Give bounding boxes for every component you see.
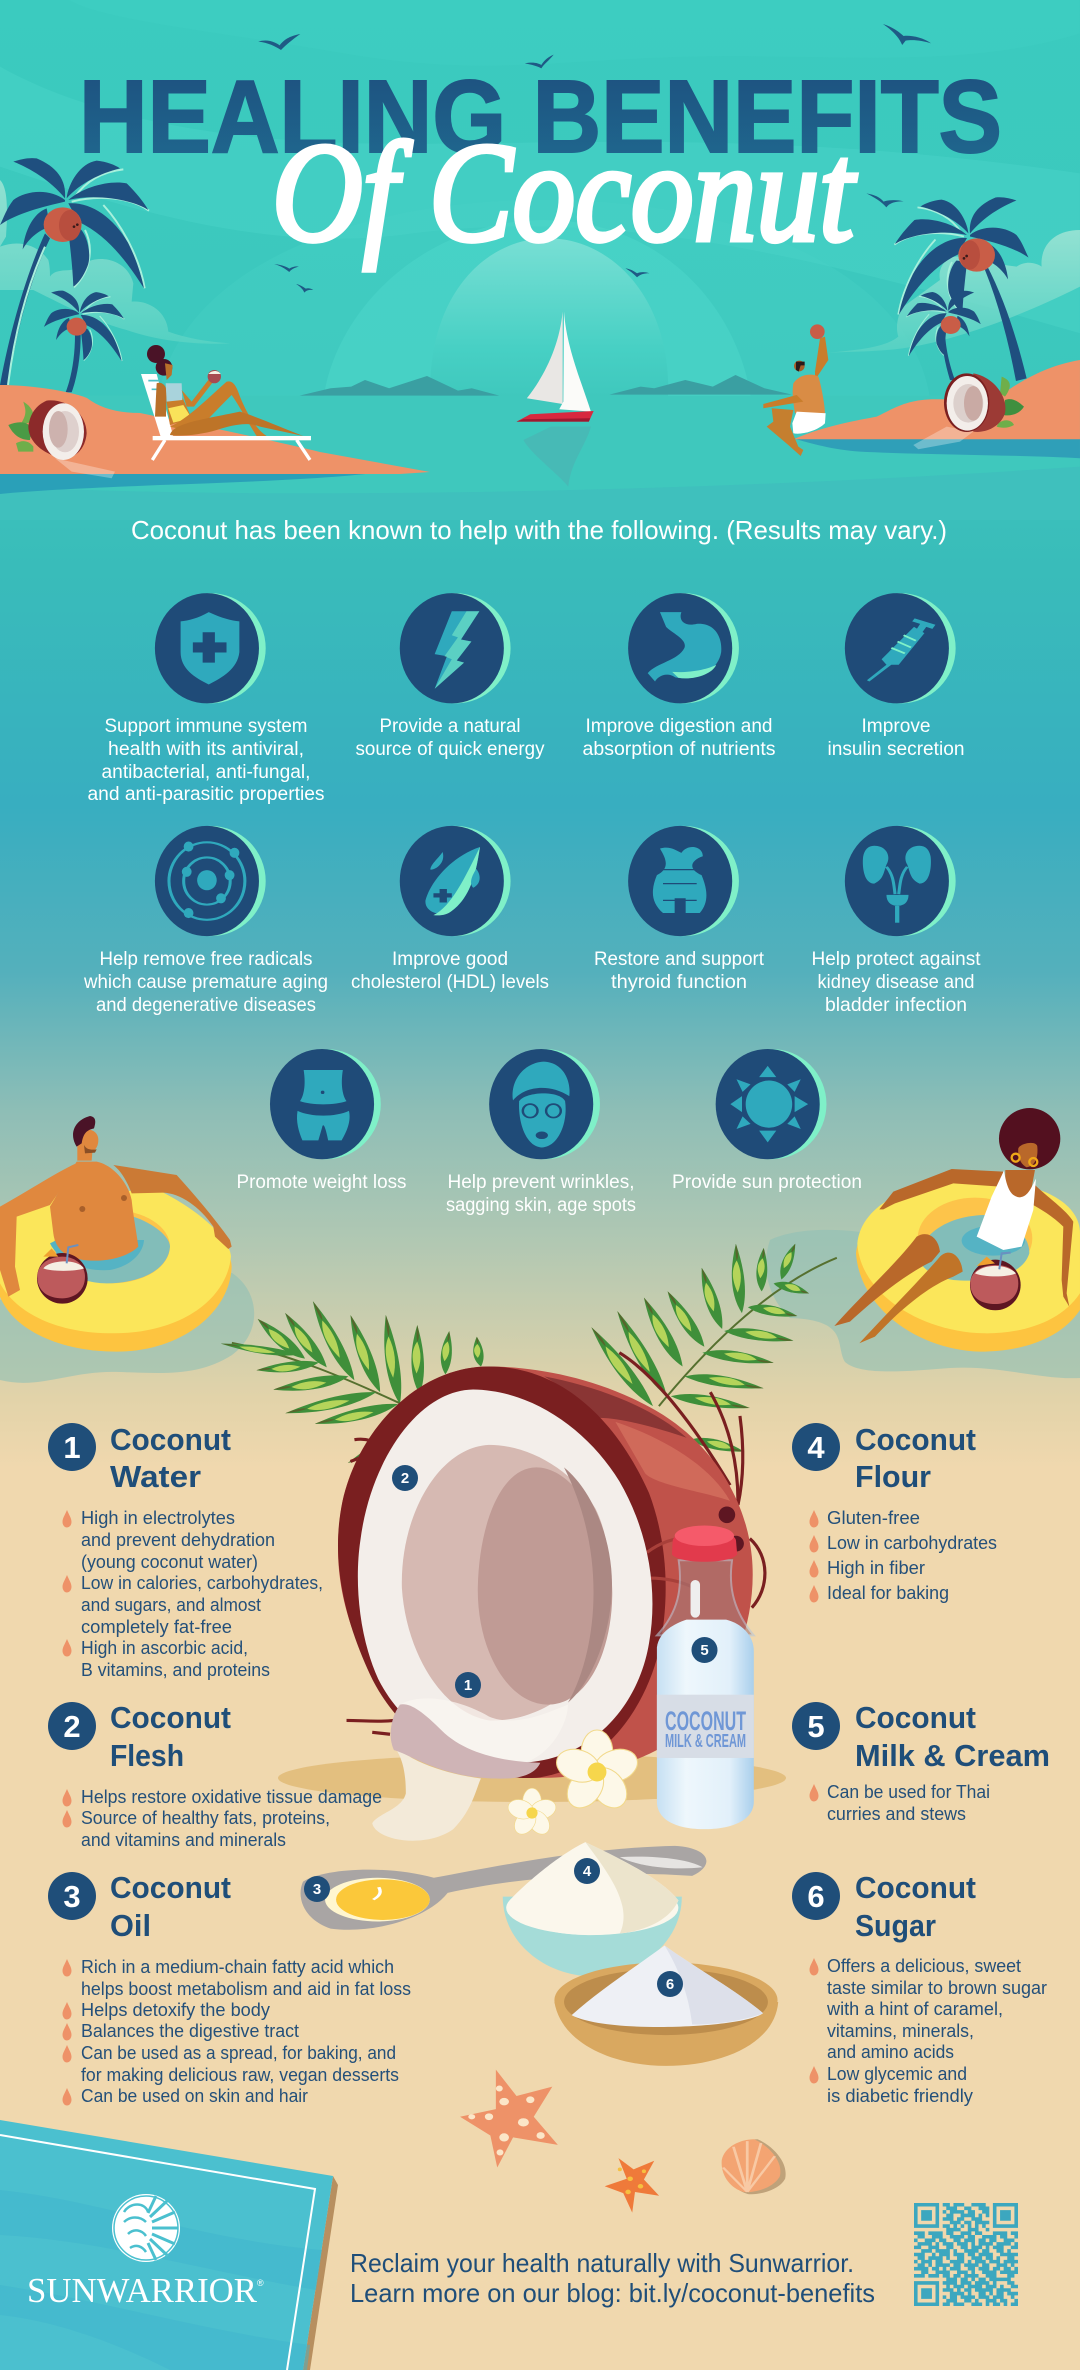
bottle label text <box>665 1706 746 1751</box>
wooden bowl of coconut sugar <box>554 1946 778 2066</box>
benefit text: wrinkles: Help prevent wrinkles, <box>448 1172 634 1193</box>
benefit text: immune: and anti-parasitic properties <box>88 784 324 805</box>
palm fronds behind coconut <box>220 1242 837 1468</box>
left palms <box>0 158 149 392</box>
section 3: coconut oil: Can be used on skin and hair <box>81 2085 308 2106</box>
section 3: coconut oil: Can be used as a spread, for baking, and <box>81 2042 396 2063</box>
benefit text: immune: antibacterial, anti-fungal, <box>102 762 310 783</box>
section 1: coconut water: High in electrolytes <box>81 1507 235 1528</box>
icon: face with towel <box>489 1049 600 1159</box>
bottle label text: MILK & CREAM <box>665 1731 746 1751</box>
section 1: coconut water: (young coconut water) <box>81 1551 258 1572</box>
section 2: coconut flesh <box>48 1700 382 1850</box>
section 6: coconut sugar: Sugar <box>855 1908 936 1943</box>
part number badges: 3 <box>313 1881 321 1898</box>
cloud left <box>0 180 230 344</box>
benefit text: immune: health with its antiviral, <box>108 739 304 760</box>
starfish small <box>605 2158 659 2213</box>
section 5: coconut milk and cream: curries and stews <box>827 1803 966 1824</box>
sand shadow under coconut <box>278 1754 786 1802</box>
section 4: coconut flour: High in fiber <box>827 1557 925 1578</box>
benefit text: energy: Provide a natural <box>380 716 520 737</box>
section 4: coconut flour: Ideal for baking <box>827 1582 949 1603</box>
birds <box>258 24 931 293</box>
mountains <box>300 375 792 396</box>
icon: waist <box>270 1049 381 1159</box>
section 6: coconut sugar: is diabetic friendly <box>827 2085 974 2106</box>
section 4: coconut flour: Gluten-free <box>827 1507 920 1528</box>
benefit text: digestion: Improve digestion and <box>586 716 772 737</box>
benefit text: kidney: kidney disease and <box>818 972 974 993</box>
section 6: coconut sugar: with a hint of caramel, <box>826 1998 1003 2019</box>
section 3: coconut oil: helps boost metabolism and aid in fat loss <box>81 1978 411 1999</box>
icon: thyroid <box>628 826 739 936</box>
section 3: coconut oil: Oil <box>110 1908 151 1943</box>
benefit text: energy: source of quick energy <box>356 739 545 760</box>
part number badges: 2 <box>401 1470 409 1487</box>
section 1: coconut water: 1 <box>63 1430 81 1465</box>
benefit text: immune: Support immune system <box>104 716 308 737</box>
section 1: coconut water: High in ascorbic acid, <box>81 1637 248 1658</box>
starfish large <box>460 2070 558 2167</box>
script subtitle: Of Coconut <box>272 113 857 271</box>
milk bottle <box>657 1525 754 1829</box>
section 1: coconut water: and sugars, and almost <box>81 1594 261 1615</box>
benefit text: digestion: absorption of nutrients <box>582 739 776 760</box>
water patch around right float <box>766 1230 1080 1378</box>
benefit text: insulin: insulin secretion <box>828 739 964 760</box>
section 3: coconut oil <box>48 1870 411 2106</box>
section 5: coconut milk and cream: 5 <box>807 1709 825 1744</box>
benefit text: sun protection: Provide sun protection <box>672 1172 862 1193</box>
spoon with coconut oil <box>301 1846 706 1930</box>
section 6: coconut sugar: vitamins, minerals, <box>827 2020 974 2041</box>
right island <box>793 360 1080 458</box>
benefit text: wrinkles: sagging skin, age spots <box>446 1195 636 1216</box>
benefit text: free radicals: Help remove free radicals <box>100 949 312 970</box>
section 6: coconut sugar <box>792 1870 1047 2106</box>
benefit text: cholesterol: Improve good <box>392 949 508 970</box>
icon: lightning bolt <box>400 593 511 703</box>
section 3: coconut oil: 3 <box>63 1879 81 1914</box>
part number badges <box>304 1465 718 1997</box>
intro text: Coconut has been known to help with the following. (Results may vary.) <box>131 515 947 545</box>
benefit text: free radicals: and degenerative diseases <box>96 995 316 1016</box>
section 3: coconut oil: Coconut <box>110 1870 231 1905</box>
section 4: coconut flour: Coconut <box>855 1422 976 1457</box>
icon: sunwarrior logo <box>112 2194 180 2262</box>
icon: stomach <box>628 593 739 703</box>
benefit text: thyroid: Restore and support <box>594 949 765 970</box>
section 2: coconut flesh: Source of healthy fats, proteins, <box>81 1807 330 1828</box>
benefit text: weight loss: Promote weight loss <box>236 1172 406 1193</box>
halved coconut on left island <box>8 400 115 478</box>
section 5: coconut milk and cream: Can be used for Thai <box>827 1781 990 1802</box>
section 6: coconut sugar: Offers a delicious, sweet <box>827 1955 1021 1976</box>
section 3: coconut oil: Balances the digestive tract <box>81 2020 299 2041</box>
part number badges: 4 <box>583 1863 592 1880</box>
section 6: coconut sugar: and amino acids <box>827 2041 954 2062</box>
section 2: coconut flesh: Flesh <box>110 1738 184 1773</box>
icon: syringe <box>845 593 956 703</box>
icon: cholesterol drop <box>400 826 511 936</box>
plumeria flower small <box>506 1788 558 1838</box>
section 1: coconut water: completely fat-free <box>81 1616 232 1637</box>
part number badges: 5 <box>700 1642 709 1659</box>
icon: shield <box>155 593 266 703</box>
part number badges: 1 <box>464 1677 472 1694</box>
sky and sea background scene <box>0 0 1080 520</box>
section 1: coconut water: and prevent dehydration <box>81 1529 275 1550</box>
section 4: coconut flour: Flour <box>855 1459 931 1494</box>
left island <box>0 385 430 494</box>
section 2: coconut flesh: 2 <box>63 1709 81 1744</box>
benefit text: insulin: Improve <box>862 716 930 737</box>
footer text: Reclaim your health naturally with Sunwarrior. <box>350 2248 854 2278</box>
benefit text: kidney: bladder infection <box>825 995 967 1016</box>
bowl of coconut flour <box>503 1842 682 1976</box>
sailboat <box>517 312 594 487</box>
title: HEALING BENEFITS <box>79 59 1002 174</box>
right palms <box>894 197 1028 381</box>
water patch around left float <box>0 1270 254 1383</box>
section 4: coconut flour: 4 <box>807 1430 825 1465</box>
section 1: coconut water: B vitamins, and proteins <box>81 1659 270 1680</box>
section 3: coconut oil: for making delicious raw, vegan desserts <box>81 2064 399 2085</box>
panel: benefit icons <box>83 593 981 1216</box>
logo wordmark: SUNWARRIOR <box>27 2271 258 2310</box>
section 6: coconut sugar: Coconut <box>855 1870 976 1905</box>
benefit text: cholesterol: cholesterol (HDL) levels <box>351 972 549 993</box>
section 6: coconut sugar: 6 <box>807 1879 825 1914</box>
section 4: coconut flour: Low in carbohydrates <box>827 1532 997 1553</box>
part number badges: 6 <box>666 1976 674 1993</box>
panel: sunwarrior towel <box>0 2120 338 2370</box>
woman on sun lounger <box>141 345 311 460</box>
man on yellow float <box>0 1116 232 1352</box>
section 3: coconut oil: Rich in a medium-chain fatty acid which <box>81 1956 394 1977</box>
section 1: coconut water <box>48 1422 323 1680</box>
coconut milk spill <box>372 1704 540 1841</box>
section 2: coconut flesh: Coconut <box>110 1700 231 1735</box>
section 5: coconut milk and cream <box>792 1700 1050 1824</box>
section 3: coconut oil: Helps detoxify the body <box>81 1999 271 2020</box>
section 1: coconut water: Coconut <box>110 1422 231 1457</box>
icon: atom radicals <box>155 826 266 936</box>
bottle label text: COCONUT <box>665 1706 746 1736</box>
halved coconut on right island <box>913 373 1024 449</box>
plumeria flower large <box>552 1730 642 1815</box>
section 6: coconut sugar: Low glycemic and <box>827 2063 967 2084</box>
section 2: coconut flesh: Helps restore oxidative tissue damage <box>81 1786 382 1807</box>
section 4: coconut flour <box>792 1422 997 1603</box>
section 2: coconut flesh: and vitamins and minerals <box>81 1829 286 1850</box>
section 1: coconut water: Water <box>110 1459 201 1494</box>
woman on yellow float <box>834 1108 1080 1352</box>
benefit text: thyroid: thyroid function <box>611 972 747 993</box>
big halved coconut <box>338 1353 765 1778</box>
icon: sun <box>716 1049 826 1159</box>
icon: kidneys <box>845 826 956 936</box>
seashell <box>722 2139 786 2194</box>
section 5: coconut milk and cream: Coconut <box>855 1700 976 1735</box>
footer text: Learn more on our blog: bit.ly/coconut-benefits <box>350 2278 875 2308</box>
cloud right <box>828 230 1080 353</box>
section 6: coconut sugar: taste similar to brown sugar <box>827 1977 1047 1998</box>
qr code <box>914 2203 1018 2306</box>
registered mark: ® <box>257 2278 264 2288</box>
benefit text: kidney: Help protect against <box>812 949 981 970</box>
section 1: coconut water: Low in calories, carbohydrates, <box>81 1572 323 1593</box>
section 5: coconut milk and cream: Milk & Cream <box>855 1738 1050 1773</box>
benefit text: free radicals: which cause premature aging <box>83 972 328 993</box>
man with raised coconut <box>763 324 828 456</box>
